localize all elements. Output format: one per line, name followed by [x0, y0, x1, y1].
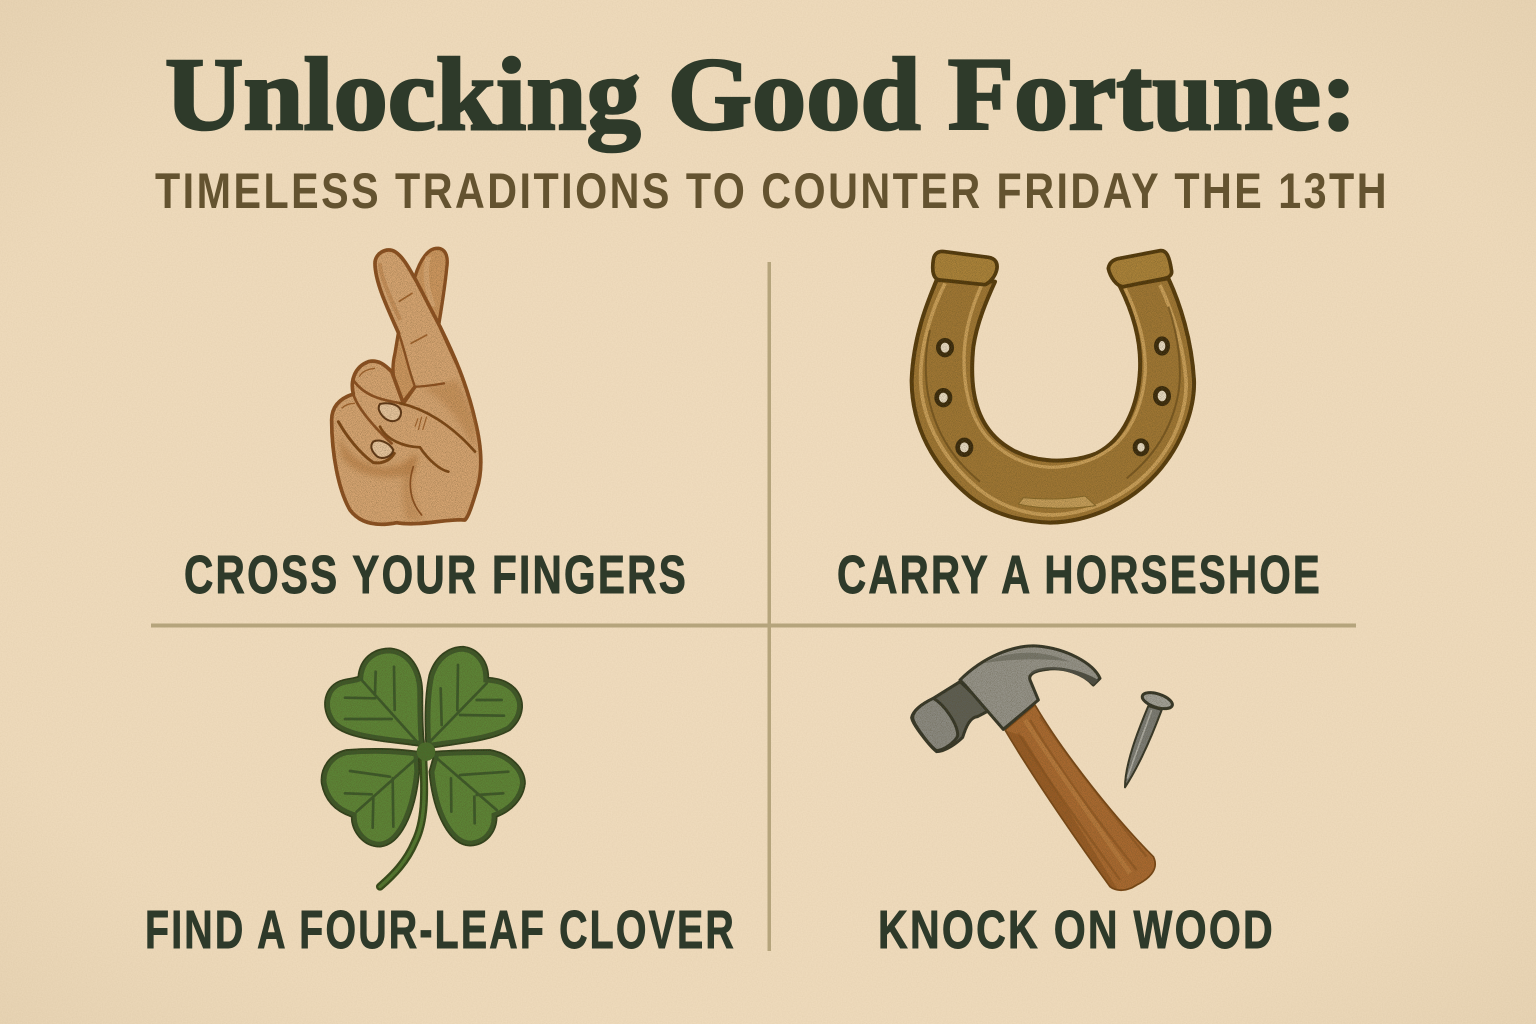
palm shading: [338, 380, 477, 520]
thumb: [380, 403, 475, 472]
head and claw: [960, 646, 1100, 729]
label: cross your fingers: CROSS YOUR FINGERS: [184, 545, 688, 605]
rim highlights: [921, 283, 1186, 515]
index finger: [375, 250, 457, 387]
thumb and finger nails: [379, 403, 401, 421]
nail holes: [937, 339, 1169, 455]
leaves: [321, 647, 525, 847]
quadrant dividers: [151, 262, 1356, 951]
nail: [1125, 689, 1174, 787]
heel caps: [933, 251, 997, 285]
label: knock on wood: KNOCK ON WOOD: [878, 900, 1275, 960]
label: find a four-leaf clover: FIND A FOUR-LEAF CLOVER: [145, 900, 736, 960]
icon: four-leaf clover: [321, 647, 525, 887]
icon: horseshoe: [912, 251, 1194, 523]
panel: find a four-leaf clover: [145, 647, 736, 960]
panel: cross your fingers: [184, 248, 688, 605]
panel: carry a horseshoe: [837, 251, 1322, 605]
panel: knock on wood: [878, 646, 1275, 960]
palm and fist: [332, 327, 481, 524]
leaf centre: [417, 742, 435, 761]
icon: crossed fingers hand: [332, 248, 481, 524]
hammer face: [913, 698, 958, 751]
title: Unlocking Good Fortune:: [165, 37, 1357, 152]
icon: hammer and nail: [912, 646, 1174, 893]
bottom bar: [1018, 496, 1096, 508]
poll and neck: [912, 682, 990, 752]
label: carry a horseshoe: CARRY A HORSESHOE: [837, 545, 1322, 605]
stem: [380, 760, 424, 887]
handle: [1005, 705, 1155, 893]
back finger: [393, 248, 447, 402]
ring finger and pinky lines: [353, 380, 402, 443]
veins: [345, 665, 508, 828]
